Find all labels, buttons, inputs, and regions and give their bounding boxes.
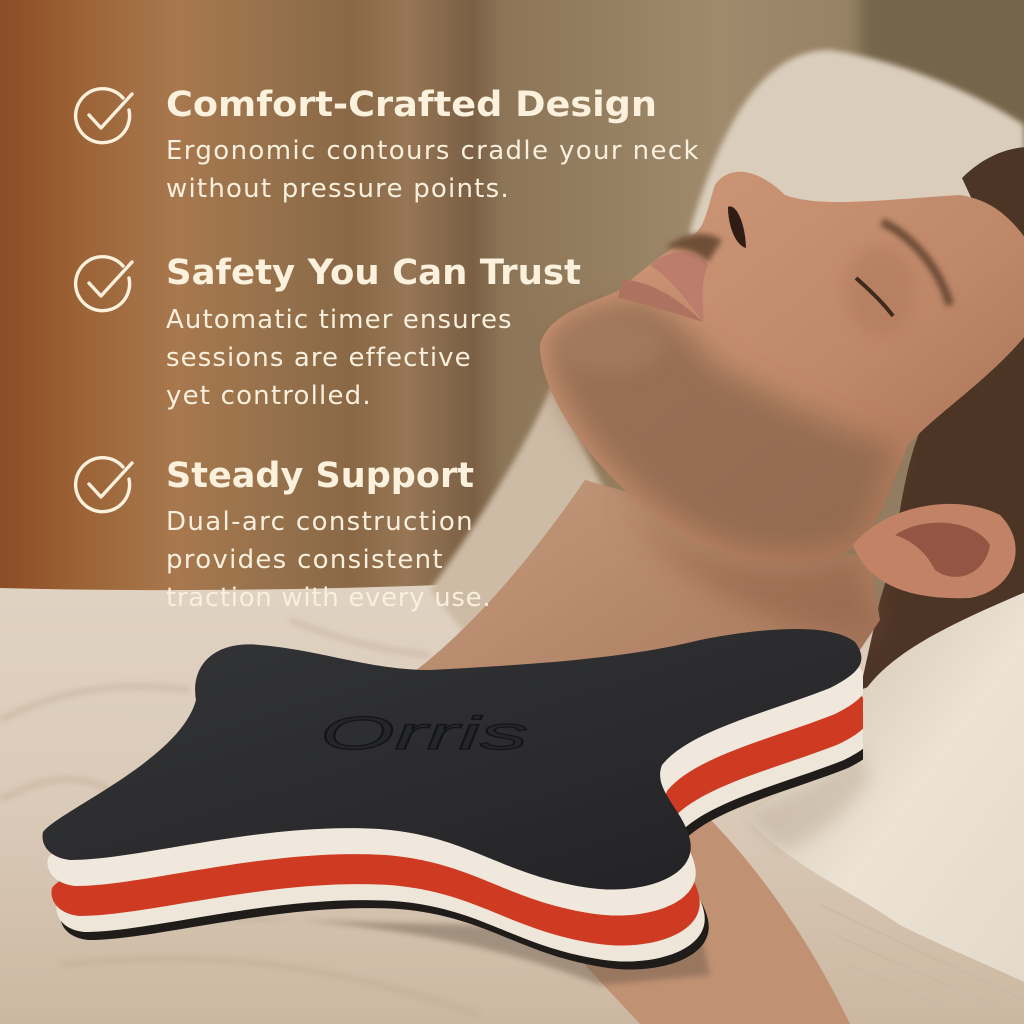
heading: Comfort-Crafted Design: Comfort-Crafted Design bbox=[166, 85, 657, 125]
benefit list bbox=[76, 85, 699, 613]
neck shadow on pillow bbox=[745, 745, 870, 850]
heading: Safety You Can Trust: Safety You Can Trust bbox=[166, 253, 581, 293]
black top surface bbox=[42, 629, 861, 890]
man: face bbox=[540, 172, 1024, 562]
front pillow bbox=[745, 590, 1024, 985]
product shadow on sheet bbox=[60, 915, 710, 985]
red foam layer bbox=[51, 685, 870, 946]
icon: check circle bbox=[76, 89, 132, 143]
text: comfort description: Ergonomic contours cradle your neck bbox=[166, 136, 699, 166]
closed eye bbox=[856, 278, 893, 316]
background: bedroom wall and curtain bbox=[0, 0, 1024, 620]
benefit 2: safety bbox=[76, 253, 581, 411]
text: safety description: yet controlled. bbox=[166, 381, 371, 411]
product: Orris neck traction pillow bbox=[42, 629, 879, 970]
moustache bbox=[665, 234, 722, 262]
eyebrow bbox=[882, 222, 950, 305]
eye socket shadow bbox=[845, 245, 915, 335]
text: safety description: sessions are effective bbox=[166, 343, 471, 373]
lower white foam layer bbox=[56, 728, 863, 962]
heading: Steady Support: Steady Support bbox=[166, 456, 474, 496]
text: safety description: Automatic timer ensures bbox=[166, 305, 512, 335]
text: support description: Dual-arc construction bbox=[166, 507, 473, 537]
chin highlight bbox=[555, 315, 665, 375]
lips bbox=[650, 252, 708, 322]
man: hair bbox=[860, 147, 1024, 690]
embossed Orris logo: Orris bbox=[320, 707, 528, 759]
man: neck and shoulder bbox=[410, 480, 880, 1024]
benefit 1: comfort bbox=[76, 85, 699, 204]
back pillow, lower section bbox=[430, 385, 640, 640]
upper white foam layer bbox=[47, 655, 866, 916]
sheet wrinkles bbox=[0, 620, 480, 1015]
base shadow layer bbox=[60, 748, 863, 970]
text: support description: provides consistent bbox=[166, 545, 443, 575]
bed sheet stripes bbox=[820, 905, 1024, 1024]
man: ear bbox=[853, 504, 1016, 598]
beard bbox=[548, 300, 895, 553]
text: comfort description: without pressure points. bbox=[166, 174, 509, 204]
icon: check circle bbox=[76, 458, 132, 512]
back pillow bbox=[690, 50, 1024, 330]
benefit 3: support bbox=[76, 456, 491, 613]
nostril bbox=[728, 206, 746, 248]
text: support description: traction with every use. bbox=[166, 583, 491, 613]
icon: check circle bbox=[76, 257, 132, 311]
shadow under jaw bbox=[620, 500, 875, 631]
bed sheet bbox=[0, 585, 1024, 1024]
